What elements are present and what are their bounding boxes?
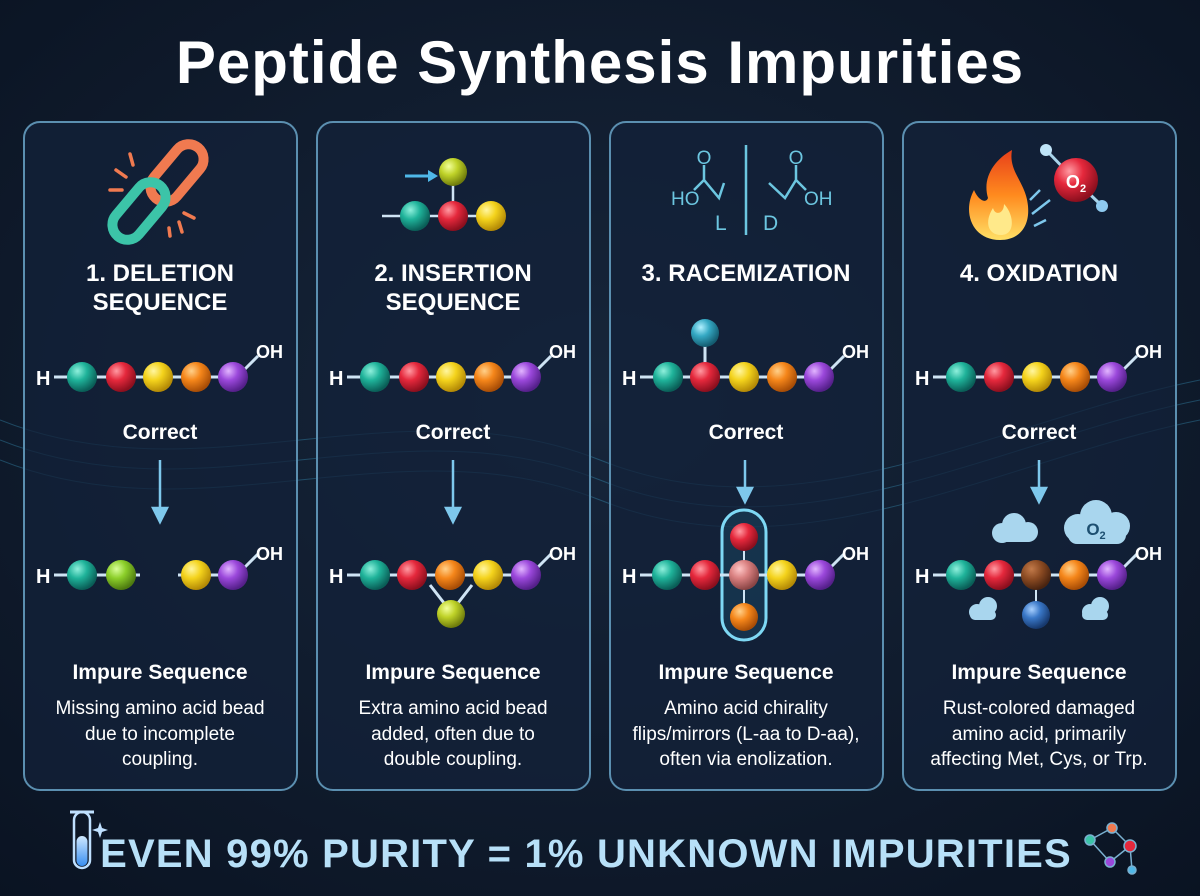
correct chain	[36, 342, 283, 392]
impure chain: H	[329, 566, 343, 588]
description: Impure Sequence	[72, 661, 248, 684]
correct chain: OH	[256, 342, 283, 362]
panel: deletion	[24, 122, 297, 790]
correct chain: H	[329, 368, 343, 390]
impure chain with clouds: O	[1086, 520, 1100, 539]
icon: L/D mirror: L	[715, 212, 727, 235]
description: Impure Sequence	[951, 661, 1127, 684]
description: added, often due to	[371, 724, 535, 745]
icon: fire and O2	[969, 144, 1108, 240]
description: amino acid, primarily	[952, 724, 1127, 745]
heading: 2. INSERTION	[374, 260, 532, 287]
panel: deletion: SEQUENCE	[93, 289, 227, 316]
description: due to incomplete	[85, 724, 235, 745]
description: Impure Sequence	[658, 661, 834, 684]
arrow	[738, 460, 752, 502]
panel: insertion	[317, 122, 590, 790]
footer: EVEN 99% PURITY = 1% UNKNOWN IMPURITIES	[100, 832, 1072, 876]
correct chain: OH	[842, 342, 869, 362]
label: correct: Correct	[709, 421, 783, 444]
label: correct: Correct	[1002, 421, 1076, 444]
description: coupling.	[122, 749, 198, 770]
icon: molecule network	[1085, 823, 1136, 874]
impure chain with clouds: OH	[1135, 544, 1162, 564]
description: flips/mirrors (L-aa to D-aa),	[632, 724, 860, 745]
impure chain: H	[36, 566, 50, 588]
description: Missing amino acid bead	[55, 698, 265, 719]
panel: insertion: SEQUENCE	[386, 289, 520, 316]
impure chain	[36, 544, 283, 590]
correct chain: H	[915, 368, 929, 390]
correct chain: H	[36, 368, 50, 390]
title: Peptide Synthesis Impurities	[176, 29, 1024, 96]
description	[930, 661, 1148, 770]
icon: fire and O2: O	[1066, 172, 1080, 192]
icon: insertion	[382, 158, 506, 231]
impure chain with clouds: 2	[1100, 530, 1106, 542]
description: affecting Met, Cys, or Trp.	[930, 749, 1148, 770]
description: often via enolization.	[659, 749, 833, 770]
description: Extra amino acid bead	[358, 698, 548, 719]
impure chain with clouds	[915, 500, 1162, 629]
icon: broken chain	[106, 138, 210, 246]
impure chain: OH	[549, 544, 576, 564]
correct chain: H	[622, 368, 636, 390]
description	[55, 661, 265, 770]
correct chain	[329, 342, 576, 392]
correct chain	[915, 342, 1162, 392]
arrow	[153, 460, 167, 522]
arrow	[1032, 460, 1046, 502]
impure chain	[622, 510, 869, 640]
description: double coupling.	[384, 749, 522, 770]
description	[632, 661, 860, 770]
heading: 3. RACEMIZATION	[642, 260, 850, 287]
description	[358, 661, 548, 770]
description: Impure Sequence	[365, 661, 541, 684]
heading: 4. OXIDATION	[960, 260, 1118, 287]
icon: L/D mirror	[671, 145, 832, 235]
impure chain: OH	[842, 544, 869, 564]
correct chain: OH	[549, 342, 576, 362]
impure chain: H	[622, 566, 636, 588]
impure chain	[329, 544, 576, 628]
impure chain: OH	[256, 544, 283, 564]
label: correct: Correct	[123, 421, 197, 444]
heading: 1. DELETION	[86, 260, 234, 287]
panel: racemization	[610, 122, 883, 790]
icon: L/D mirror: O	[789, 148, 803, 169]
arrow	[446, 460, 460, 522]
icon: fire and O2: 2	[1080, 183, 1086, 195]
icon: test tube	[70, 812, 108, 868]
label: correct: Correct	[416, 421, 490, 444]
impure chain with clouds: H	[915, 566, 929, 588]
icon: L/D mirror: O	[697, 148, 711, 169]
panel: oxidation	[903, 122, 1176, 790]
description: Amino acid chirality	[664, 698, 828, 719]
correct chain	[622, 319, 869, 392]
description: Rust-colored damaged	[943, 698, 1135, 719]
icon: L/D mirror: OH	[804, 189, 832, 210]
icon: L/D mirror: D	[763, 212, 778, 235]
correct chain: OH	[1135, 342, 1162, 362]
icon: L/D mirror: HO	[671, 189, 700, 210]
